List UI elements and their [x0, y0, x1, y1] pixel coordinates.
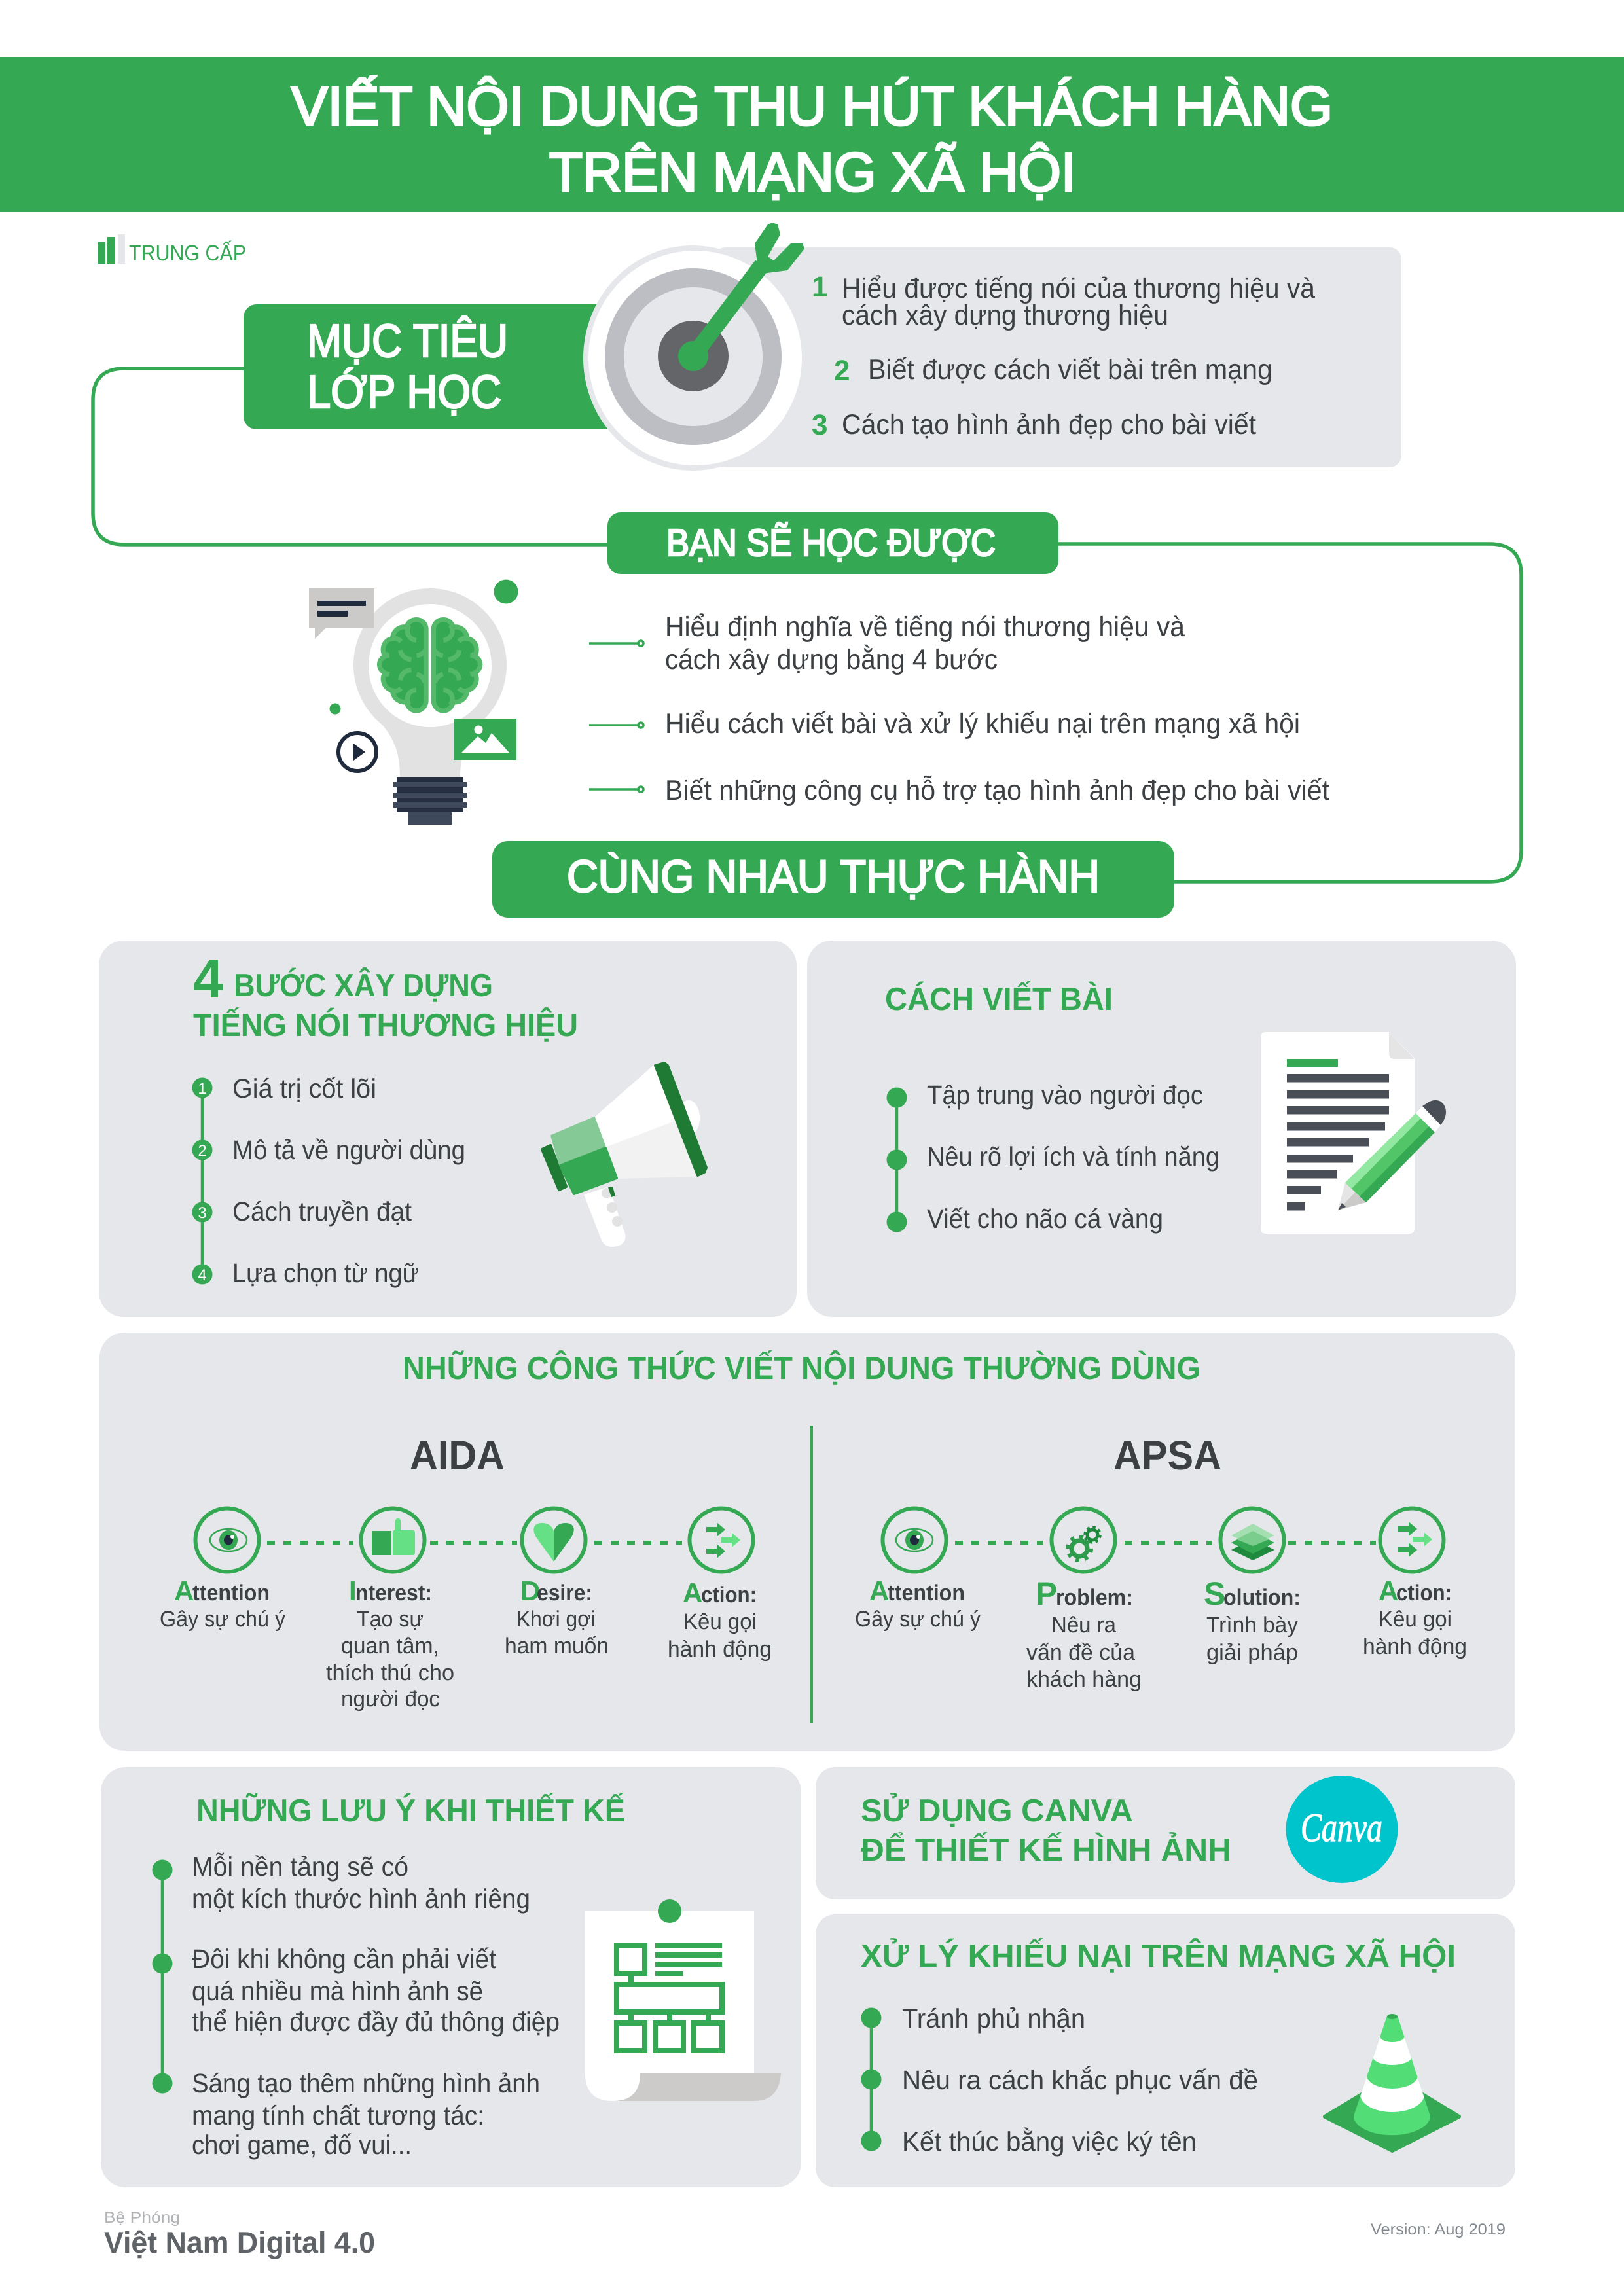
- formula: APSA: [855, 1433, 1467, 1692]
- icon: target with dart: [583, 223, 804, 471]
- heading: 4 steps: TIẾNG NÓI THƯƠNG HIỆU: [193, 1007, 578, 1043]
- step: solution: S: [1204, 1575, 1225, 1612]
- heading: bạn sẽ học được: BẠN SẼ HỌC ĐƯỢC: [666, 522, 996, 564]
- panel: objectives list: [713, 247, 1401, 467]
- level badge: trung cấp: TRUNG CẤP: [129, 240, 246, 266]
- icon: picture: [454, 719, 516, 760]
- heading: cách viết bài: CÁCH VIẾT BÀI: [885, 981, 1113, 1017]
- heading: 4 steps: 4: [193, 948, 223, 1009]
- icon: speech bubble: [309, 588, 374, 639]
- step: action: hành động: [1363, 1634, 1467, 1659]
- step: interest: quan tâm,: [341, 1634, 439, 1659]
- step: interest: [326, 1508, 454, 1712]
- heading: use canva: ĐỂ THIẾT KẾ HÌNH ẢNH: [861, 1832, 1231, 1868]
- brain: [380, 620, 480, 711]
- step: action: [668, 1508, 772, 1662]
- step: action: hành động: [668, 1637, 772, 1662]
- heading: complaints: XỬ LÝ KHIẾU NẠI TRÊN MẠNG XÃ HỘI: [861, 1938, 1456, 1974]
- heading: mục tiêu lớp học: LỚP HỌC: [307, 367, 501, 418]
- level badge: trung cấp: [98, 234, 246, 266]
- numbered steps: 3: [198, 1204, 207, 1222]
- formula: AIDA: AIDA: [410, 1433, 505, 1479]
- step: attention: ttention: [888, 1581, 965, 1605]
- bullet list: what you will learn: [589, 611, 1329, 806]
- icon: canva logo: Canva: [1301, 1806, 1382, 1850]
- bullet list: what you will learn: Hiểu cách viết bài và xử lý khiếu nại trên mạng xã hội: [665, 708, 1300, 740]
- bullet list: design notes: [152, 1852, 560, 2160]
- panel: objectives list: Biết được cách viết bài trên mạng: [868, 354, 1272, 386]
- bullet list: what you will learn: Hiểu định nghĩa về tiếng nói thương hiệu và: [665, 611, 1185, 643]
- footer: organiser: [104, 2209, 375, 2259]
- heading: 4 steps: [193, 948, 578, 1043]
- heading: design notes: NHỮNG LƯU Ý KHI THIẾT KẾ: [196, 1793, 625, 1829]
- panel: xử lý khiếu nại: [816, 1914, 1515, 2187]
- step: attention: A: [174, 1575, 194, 1606]
- header band with title: [0, 57, 1624, 212]
- panel: objectives list: 2: [834, 355, 850, 387]
- icon: pinned layout sheet: [585, 1899, 781, 2101]
- step: action: ction:: [1396, 1581, 1452, 1605]
- heading: mục tiêu lớp học: [244, 304, 689, 429]
- icon: play button: [338, 733, 376, 771]
- numbered steps: 4: [198, 1266, 207, 1284]
- step: interest: Tạo sự: [357, 1607, 424, 1632]
- bullet list: design notes: mang tính chất tương tác:: [192, 2100, 484, 2130]
- panel: objectives list: cách xây dựng thương hiệu: [842, 300, 1168, 331]
- step: desire: [505, 1508, 609, 1659]
- icon: canva logo: [1286, 1776, 1398, 1883]
- step: action: A: [683, 1577, 702, 1608]
- bullet list: design notes: Sáng tạo thêm những hình ảnh: [192, 2068, 540, 2098]
- bullet list: design notes: một kích thước hình ảnh riêng: [192, 1884, 530, 1914]
- step: solution: [1204, 1508, 1301, 1665]
- heading: 4 steps: BƯỚC XÂY DỰNG: [234, 967, 493, 1003]
- bullet list: what you will learn: Biết những công cụ hỗ trợ tạo hình ảnh đẹp cho bài viết: [665, 775, 1329, 806]
- step: attention: [855, 1508, 981, 1632]
- bullet list: writing tips: Viết cho não cá vàng: [927, 1204, 1163, 1234]
- icon: traffic cone: [1325, 2013, 1459, 2151]
- icon: light bulb with brain: [353, 588, 507, 825]
- footer: organiser: Bệ Phóng: [104, 2209, 180, 2227]
- formula: APSA: APSA: [1113, 1433, 1221, 1479]
- step: action: A: [1379, 1575, 1398, 1606]
- header band with title: TRÊN MẠNG XÃ HỘI: [549, 141, 1076, 203]
- bullet list: design notes: thể hiện được đầy đủ thông điệp: [192, 2007, 560, 2037]
- icon: megaphone: [542, 1063, 706, 1247]
- heading: mục tiêu lớp học: MỤC TIÊU: [307, 315, 508, 367]
- step: action: ction:: [701, 1583, 757, 1607]
- step: problem: vấn đề của: [1026, 1640, 1135, 1665]
- numbered steps: [192, 1073, 465, 1288]
- panel: objectives list: 3: [812, 409, 827, 441]
- step: action: Kêu gọi: [1379, 1607, 1452, 1632]
- step: interest: người đọc: [341, 1687, 440, 1712]
- step: desire: Khơi gợi: [516, 1607, 596, 1632]
- decorative dots: [330, 580, 518, 715]
- bullet list: design notes: Mỗi nền tảng sẽ có: [192, 1852, 408, 1882]
- heading: formulas: NHỮNG CÔNG THỨC VIẾT NỘI DUNG THƯỜNG DÙNG: [403, 1350, 1200, 1386]
- bulb base: [393, 777, 467, 825]
- step: interest: nterest:: [355, 1581, 432, 1605]
- step: interest: thích thú cho: [326, 1660, 454, 1685]
- panel: objectives list: Cách tạo hình ảnh đẹp cho bài viết: [842, 409, 1256, 440]
- heading: use canva: SỬ DỤNG CANVA: [861, 1793, 1133, 1829]
- step: attention: A: [869, 1575, 889, 1606]
- heading: use canva: [861, 1793, 1231, 1868]
- step: problem: roblem:: [1056, 1585, 1133, 1610]
- panel: objectives list: 1: [812, 271, 827, 303]
- step: problem: [1026, 1508, 1142, 1692]
- bullet list: complaint handling: Tránh phủ nhận: [902, 2003, 1085, 2034]
- panel: những công thức viết nội dung: [99, 1333, 1515, 1751]
- step: solution: giải pháp: [1206, 1640, 1298, 1665]
- panel: những lưu ý khi thiết kế: [101, 1767, 801, 2187]
- formula: AIDA: [160, 1433, 772, 1712]
- bullet list: writing tips: Tập trung vào người đọc: [927, 1080, 1203, 1110]
- step: attention: Gây sự chú ý: [160, 1607, 285, 1632]
- numbered steps: Lựa chọn từ ngữ: [232, 1258, 419, 1288]
- footer: organiser: Việt Nam Digital 4.0: [104, 2225, 375, 2259]
- heading: cùng nhau thực hành: CÙNG NHAU THỰC HÀNH: [567, 851, 1100, 902]
- bullet list: writing tips: Nêu rõ lợi ích và tính năng: [927, 1141, 1219, 1172]
- bullet list: what you will learn: cách xây dựng bằng 4 bước: [665, 644, 998, 675]
- step: action: Kêu gọi: [683, 1609, 757, 1634]
- bullet list: design notes: Đôi khi không cần phải viết: [192, 1944, 497, 1974]
- header band with title: VIẾT NỘI DUNG THU HÚT KHÁCH HÀNG: [291, 75, 1333, 137]
- step: interest: I: [349, 1575, 357, 1606]
- numbered steps: Cách truyền đạt: [232, 1196, 412, 1227]
- panel: 4 bước xây dựng tiếng nói thương hiệu: [99, 941, 797, 1317]
- numbered steps: Mô tả về người dùng: [232, 1135, 465, 1165]
- bullet list: complaint handling: [861, 2003, 1258, 2157]
- step: attention: ttention: [192, 1581, 270, 1605]
- step: attention: [160, 1508, 285, 1632]
- step: problem: P: [1036, 1575, 1057, 1612]
- heading: cùng nhau thực hành: [492, 841, 1174, 918]
- bullet list: complaint handling: Kết thúc bằng việc ký tên: [902, 2126, 1197, 2157]
- step: problem: Nêu ra: [1051, 1613, 1116, 1638]
- step: solution: olution:: [1223, 1585, 1301, 1610]
- connector line: objectives to learning: [93, 368, 609, 545]
- heading: bạn sẽ học được: [607, 512, 1058, 574]
- bullet list: complaint handling: Nêu ra cách khắc phục vấn đề: [902, 2065, 1258, 2095]
- footer: version: Version: Aug 2019: [1371, 2221, 1506, 2238]
- numbered steps: 1: [198, 1080, 207, 1098]
- step: desire: esire:: [537, 1581, 592, 1605]
- bullet list: design notes: chơi game, đố vui...: [192, 2130, 412, 2160]
- connector line: learning to practice: [1058, 544, 1521, 882]
- bullet list: design notes: quá nhiều mà hình ảnh sẽ: [192, 1976, 483, 2006]
- panel: cách viết bài: [807, 941, 1516, 1317]
- step: desire: D: [520, 1575, 540, 1606]
- step: problem: khách hàng: [1026, 1667, 1142, 1692]
- step: action: [1363, 1508, 1467, 1659]
- panel: sử dụng canva: [816, 1767, 1515, 1899]
- step: solution: Trình bày: [1206, 1613, 1298, 1638]
- icon: document with pencil: [1261, 1032, 1446, 1234]
- panel: objectives list: Hiểu được tiếng nói của thương hiệu và: [842, 273, 1315, 304]
- step: desire: ham muốn: [505, 1634, 609, 1659]
- numbered steps: Giá trị cốt lõi: [232, 1073, 376, 1103]
- numbered steps: 2: [198, 1142, 207, 1160]
- bullet list: writing tips: [886, 1080, 1219, 1234]
- bulb glass: [353, 588, 507, 778]
- step: attention: Gây sự chú ý: [855, 1607, 981, 1632]
